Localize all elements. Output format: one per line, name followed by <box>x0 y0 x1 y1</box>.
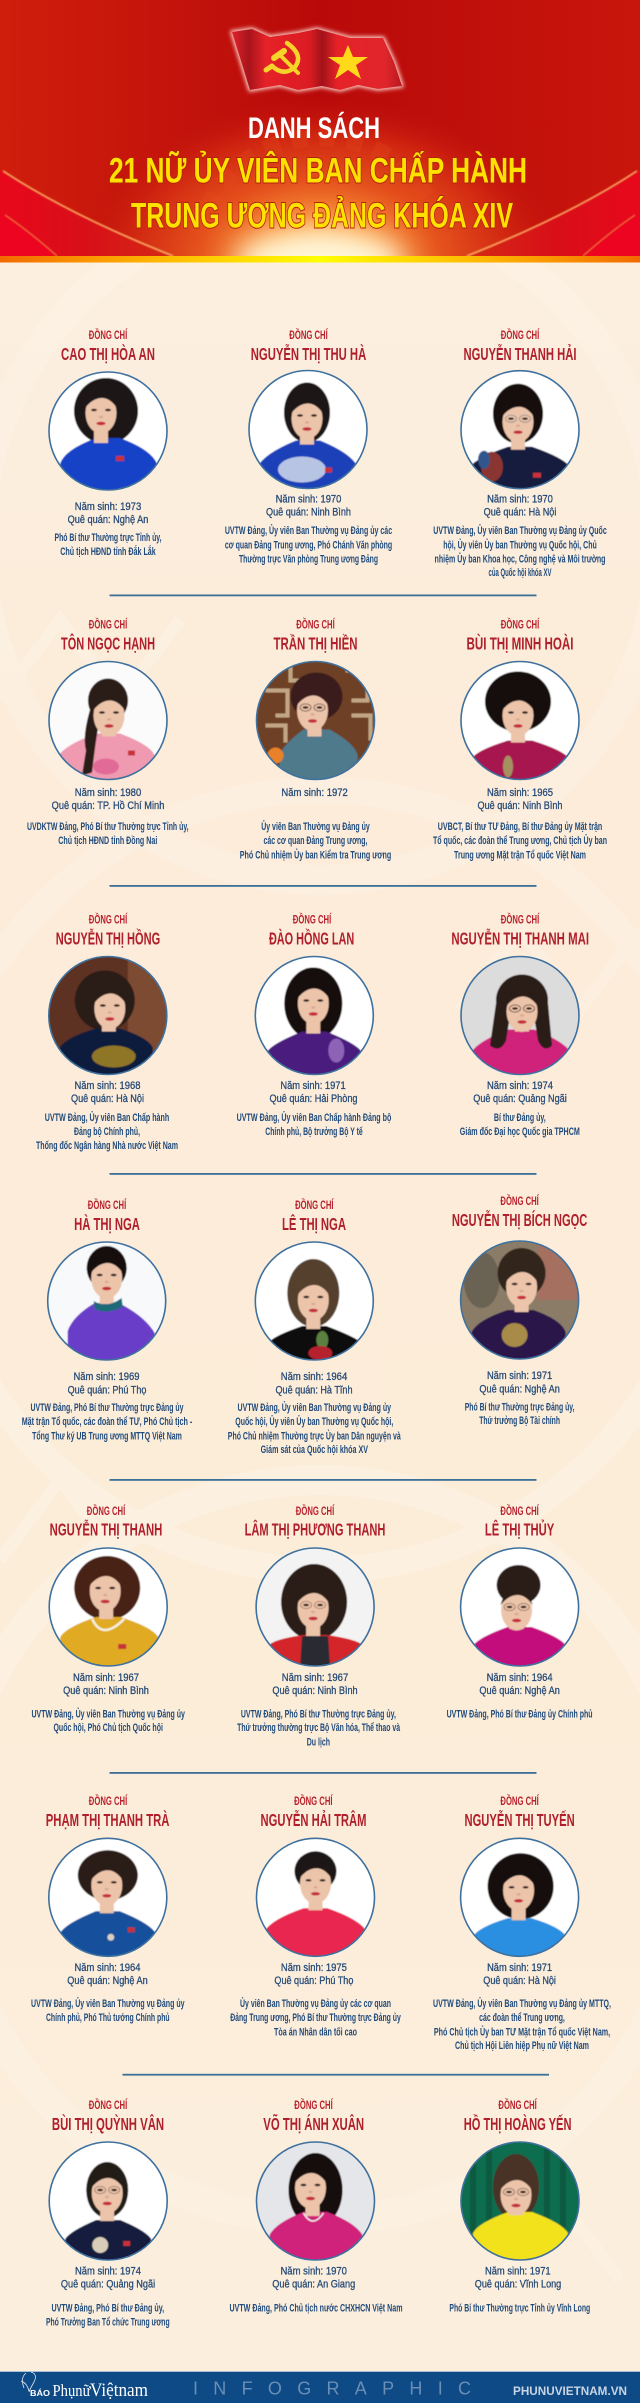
card: Tôn Ngọc Hạnh: Chủ tịch HĐND tỉnh Đồng Nai <box>58 835 157 847</box>
portrait <box>256 2141 376 2261</box>
bio: Năm sinh: 1964 <box>74 1962 140 1974</box>
portrait <box>255 1547 375 1667</box>
card: Nguyễn Thị Thanh: Quê quán: Ninh Bình <box>63 1685 149 1697</box>
bio: Năm sinh: 1969 <box>74 1371 140 1383</box>
card: Trần Thị Hiền: Phó Chủ nhiệm Ủy ban Kiểm tra Trung ương <box>240 848 391 862</box>
role: Phó Bí thư Thường trực Đảng ủy, <box>465 1402 574 1414</box>
card: Phạm Thị Thanh Trà <box>31 1795 185 2024</box>
card: Nguyễn Thị Thu Hà: ĐỒNG CHÍ <box>289 329 328 342</box>
portrait <box>460 660 580 780</box>
card: Tôn Ngọc Hạnh: ĐỒNG CHÍ <box>89 618 128 632</box>
card: Nguyễn Thị Thu Hà <box>225 329 392 566</box>
card: Nguyễn Thị Thu Hà: Thường trực Văn phòng Trung ương Đảng <box>239 554 378 566</box>
card: Bùi Thị Minh Hoài: Quê quán: Ninh Bình <box>478 800 562 812</box>
card: Lê Thị Nga: Phó Chủ nhiệm Thường trực Ủy ban Dân nguyện và <box>228 1430 401 1442</box>
card: Bùi Thị Quỳnh Vân: ĐỒNG CHÍ <box>89 2099 128 2112</box>
bio: Năm sinh: 1980 <box>75 787 141 799</box>
portrait <box>254 1241 374 1361</box>
card: Cao Thị Hòa An: ĐỒNG CHÍ <box>89 329 128 342</box>
card: Hồ Thị Hoàng Yến: Quê quán: Vĩnh Long <box>475 2278 561 2290</box>
role: Phó Bí thư Thường trực Tỉnh ủy, <box>54 532 162 544</box>
card: Nguyễn Hải Trâm: Đảng Trung ương, Phó Bí thư Thường trực Đảng ủy <box>230 2012 401 2024</box>
card: Nguyễn Hải Trâm: ĐỒNG CHÍ <box>294 1795 333 1808</box>
bio: Năm sinh: 1972 <box>281 787 348 799</box>
card: Võ Thị Ánh Xuân <box>230 2099 403 2314</box>
card: Phạm Thị Thanh Trà: ĐỒNG CHÍ <box>89 1795 128 1808</box>
card: Đào Hồng Lan <box>237 914 392 1138</box>
card: Lê Thị Nga: Giám sát của Quốc hội khóa XV <box>261 1444 368 1456</box>
header gold band <box>0 256 640 262</box>
portrait <box>48 660 168 780</box>
bio: Năm sinh: 1971 <box>487 1962 552 1974</box>
card: Nguyễn Thị Thu Hà: cơ quan Đảng Trung ương, Phó Chánh Văn phòng <box>225 540 392 552</box>
card: Bùi Thị Minh Hoài <box>433 618 607 862</box>
card: Nguyễn Thị Tuyến <box>433 1795 611 2052</box>
name: CAO THỊ HÒA AN <box>61 343 155 364</box>
card: Nguyễn Thanh Hải <box>433 329 607 579</box>
portrait <box>48 956 168 1076</box>
bio: Năm sinh: 1974 <box>75 2266 141 2278</box>
role: UVTW Đảng, Phó Bí thư Thường trực Đảng ủy, <box>241 1708 396 1720</box>
card: Nguyễn Thị Bích Ngọc <box>452 1195 588 1427</box>
name: BÙI THỊ QUỲNH VÂN <box>52 2113 164 2134</box>
portrait <box>48 371 168 491</box>
card: Nguyễn Thị Thanh Mai: Giám đốc Đại học Quốc gia TPHCM <box>460 1126 580 1138</box>
name: PHẠM THỊ THANH TRÀ <box>46 1809 170 1830</box>
card: Hồ Thị Hoàng Yến: ĐỒNG CHÍ <box>498 2099 537 2112</box>
card: Hà Thị Nga: Tổng Thư ký UB Trung ương MTTQ Việt Nam <box>32 1430 182 1442</box>
bio: Năm sinh: 1970 <box>276 494 341 506</box>
footer <box>0 2371 640 2403</box>
footer logo: Phụnữ <box>52 2381 91 2400</box>
card: Nguyễn Thị Tuyến: các đoàn thể Trung ương, <box>479 2012 565 2024</box>
card: Nguyễn Thị Thanh Mai <box>451 914 589 1138</box>
name: NGUYỄN THỊ HỒNG <box>56 927 160 948</box>
card: Nguyễn Thị Tuyến: Quê quán: Hà Nội <box>483 1975 556 1987</box>
name: NGUYỄN THỊ THU HÀ <box>251 343 366 364</box>
card: Hà Thị Nga <box>22 1199 193 1442</box>
card: Nguyễn Thị Hồng <box>36 914 178 1152</box>
footer logo: Việtnam <box>90 2380 148 2401</box>
name: NGUYỄN THANH HẢI <box>464 343 576 364</box>
footer logo: BÁO <box>30 2389 50 2398</box>
name: LÂM THỊ PHƯƠNG THANH <box>245 1519 385 1540</box>
footer logo <box>21 2372 148 2401</box>
card: Phạm Thị Thanh Trà: Quê quán: Nghệ An <box>67 1975 148 1987</box>
name: LÊ THỊ THỦY <box>485 1519 555 1540</box>
card: Đào Hồng Lan: Quê quán: Hải Phòng <box>270 1093 358 1105</box>
card: Cao Thị Hòa An: Chủ tịch HĐND tỉnh Đắk Lắk <box>60 545 156 558</box>
card: Nguyễn Thị Bích Ngọc: Quê quán: Nghệ An <box>479 1384 560 1396</box>
card: Hà Thị Nga: Quê quán: Phú Thọ <box>68 1384 146 1396</box>
name: NGUYỄN THỊ THANH <box>50 1519 162 1540</box>
name: TRẦN THỊ HIỀN <box>274 632 358 653</box>
card: Nguyễn Thị Thanh: Quốc hội, Phó Chủ tịch Quốc hội <box>54 1722 163 1734</box>
portrait <box>47 1241 167 1361</box>
card: Nguyễn Thị Hồng: Đảng bộ Chính phủ, <box>74 1126 140 1138</box>
name: NGUYỄN HẢI TRÂM <box>260 1809 366 1830</box>
role: UVTW Đảng, Phó Bí thư Đảng ủy, <box>51 2302 164 2314</box>
bio: Năm sinh: 1968 <box>74 1080 140 1092</box>
card: Lâm Thị Phương Thanh: Thứ trưởng thường trực Bộ Văn hóa, Thể thao và <box>237 1722 401 1734</box>
portrait <box>254 956 374 1076</box>
portrait <box>248 370 368 490</box>
bio: Năm sinh: 1975 <box>281 1962 347 1974</box>
portrait <box>256 1837 376 1957</box>
name: TÔN NGỌC HẠNH <box>61 632 155 653</box>
name: HÀ THỊ NGA <box>74 1213 140 1234</box>
card: Nguyễn Thị Hồng: Quê quán: Hà Nội <box>71 1093 144 1105</box>
card: Nguyễn Hải Trâm <box>230 1795 401 2038</box>
portrait <box>48 1547 168 1667</box>
card: Lê Thị Nga <box>228 1199 401 1456</box>
bio: Năm sinh: 1967 <box>73 1672 139 1684</box>
card: Nguyễn Thị Hồng: Thống đốc Ngân hàng Nhà nước Việt Nam <box>36 1140 178 1152</box>
portrait <box>460 1547 580 1667</box>
role: UVTW Đảng, Ủy viên Ban Chấp hành Đảng bộ <box>237 1111 392 1124</box>
role: UVTW Đảng, Ủy viên Ban Thường vụ Đảng ủy <box>31 1997 185 2010</box>
card: Võ Thị Ánh Xuân: ĐỒNG CHÍ <box>294 2099 333 2112</box>
card: Tôn Ngọc Hạnh <box>27 618 189 847</box>
card: Bùi Thị Minh Hoài: ĐỒNG CHÍ <box>501 618 540 632</box>
card: Lê Thị Nga: Quốc hội, Ủy viên Ủy ban Thường vụ Quốc hội, <box>235 1415 393 1428</box>
header banner <box>0 0 640 256</box>
name: LÊ THỊ NGA <box>282 1213 346 1234</box>
role: Ủy viên Ban Thường vụ Đảng ủy các cơ quan <box>240 1997 391 2010</box>
portrait <box>48 2141 168 2261</box>
card: Nguyễn Thanh Hải: của Quốc hội khóa XV <box>488 567 552 579</box>
name: NGUYỄN THỊ TUYẾN <box>464 1809 575 1830</box>
bio: Năm sinh: 1971 <box>487 1370 552 1382</box>
card: Lâm Thị Phương Thanh: Du lịch <box>307 1736 330 1748</box>
role: UVTW Đảng, Phó Chủ tịch nước CHXHCN Việt Nam <box>230 2302 403 2314</box>
card: Cao Thị Hòa An <box>48 329 168 558</box>
card: Lâm Thị Phương Thanh <box>237 1505 401 1748</box>
card: Nguyễn Thị Bích Ngọc: Thứ trưởng Bộ Tài chính <box>479 1415 560 1427</box>
card: Nguyễn Thị Thu Hà: Quê quán: Ninh Bình <box>266 506 351 518</box>
bio: Năm sinh: 1964 <box>487 1672 553 1684</box>
bio: Năm sinh: 1973 <box>75 501 141 513</box>
portrait <box>48 1837 168 1957</box>
portrait <box>460 1240 580 1360</box>
footer label: INFOGRAPHIC <box>193 2378 471 2398</box>
portrait <box>460 370 580 490</box>
card: Đào Hồng Lan: Chính phủ, Bộ trưởng Bộ Y tế <box>265 1126 363 1138</box>
card: Lê Thị Thủy: Quê quán: Nghệ An <box>479 1685 560 1697</box>
name: ĐÀO HỒNG LAN <box>269 927 354 948</box>
card: Nguyễn Thanh Hải: ĐỒNG CHÍ <box>501 329 540 342</box>
card: Hà Thị Nga: Mặt trận Tổ quốc, các đoàn thể TƯ, Phó Chủ tịch - <box>22 1416 193 1428</box>
role: UVTW Đảng, Ủy viên Ban Thường vụ Đảng ủy <box>31 1708 186 1720</box>
role: UVTW Đảng, Ủy viên Ban Chấp hành <box>45 1111 169 1124</box>
bio: Năm sinh: 1970 <box>280 2266 347 2278</box>
role: UVTW Đảng, Phó Bí thư Thường trực Đảng ủy <box>30 1402 184 1414</box>
bio: Năm sinh: 1967 <box>282 1672 348 1684</box>
card: Nguyễn Hải Trâm: Quê quán: Phú Thọ <box>274 1975 353 1987</box>
card: Hà Thị Nga: ĐỒNG CHÍ <box>88 1199 127 1212</box>
card: Lê Thị Nga: Quê quán: Hà Tĩnh <box>276 1384 352 1396</box>
card: Lâm Thị Phương Thanh: ĐỒNG CHÍ <box>296 1505 335 1518</box>
role: Ủy viên Ban Thường vụ Đảng ủy <box>261 820 370 833</box>
card: Tôn Ngọc Hạnh: Quê quán: TP. Hồ Chí Minh <box>52 800 164 812</box>
card: Nguyễn Thị Tuyến: ĐỒNG CHÍ <box>500 1795 539 1808</box>
title: DANH SÁCH <box>248 111 380 145</box>
bio: Năm sinh: 1964 <box>281 1371 347 1383</box>
card: Đào Hồng Lan: ĐỒNG CHÍ <box>293 914 332 926</box>
card: Nguyễn Thị Thanh: ĐỒNG CHÍ <box>87 1505 126 1518</box>
card: Võ Thị Ánh Xuân: Quê quán: An Giang <box>272 2278 355 2290</box>
icon: party and national flags <box>232 29 402 90</box>
bio: Năm sinh: 1971 <box>485 2266 551 2278</box>
card: Bùi Thị Quỳnh Vân: Phó Trưởng Ban Tổ chức Trung ương <box>46 2316 170 2328</box>
card: Nguyễn Thị Thanh Mai: Quê quán: Quảng Ngãi <box>473 1093 567 1105</box>
card: Hồ Thị Hoàng Yến <box>449 2099 590 2314</box>
name: VÕ THỊ ÁNH XUÂN <box>263 2113 364 2134</box>
card: Nguyễn Thị Thanh <box>31 1505 186 1734</box>
role: UVTW Đảng, Ủy viên Ban Thường vụ Đảng ủy <box>238 1401 392 1414</box>
bio: Năm sinh: 1971 <box>280 1080 346 1092</box>
name: BÙI THỊ MINH HOÀI <box>466 632 574 653</box>
card: Lâm Thị Phương Thanh: Quê quán: Ninh Bình <box>272 1685 358 1697</box>
card: Lê Thị Nga: ĐỒNG CHÍ <box>295 1199 334 1212</box>
name: HỒ THỊ HOÀNG YẾN <box>464 2113 571 2134</box>
card: Lê Thị Thủy <box>447 1505 593 1720</box>
portrait <box>460 956 580 1076</box>
card: Bùi Thị Quỳnh Vân: Quê quán: Quảng Ngãi <box>61 2278 155 2290</box>
card: Nguyễn Thị Bích Ngọc: ĐỒNG CHÍ <box>500 1195 539 1208</box>
card: Nguyễn Thanh Hải: Quê quán: Hà Nội <box>484 506 556 518</box>
portrait <box>256 660 376 780</box>
card: Cao Thị Hòa An: Quê quán: Nghệ An <box>68 514 148 526</box>
role: Bí thư Đảng ủy, <box>494 1112 546 1124</box>
card: Nguyễn Hải Trâm: Tòa án Nhân dân tối cao <box>274 2026 357 2038</box>
card: Trần Thị Hiền <box>240 618 391 862</box>
bio: Năm sinh: 1974 <box>487 1080 553 1092</box>
portrait <box>460 2141 580 2261</box>
bio: Năm sinh: 1970 <box>487 494 553 506</box>
card: Trần Thị Hiền: ĐỒNG CHÍ <box>296 618 335 632</box>
footer website: PHUNUVIETNAM.VN <box>513 2386 627 2398</box>
title <box>109 111 527 236</box>
role: UVTW Đảng, Ủy viên Ban Thường vụ Đảng ủy các <box>225 524 392 537</box>
role: UVDKTW Đảng, Phó Bí thư Thường trực Tỉnh ủy, <box>27 821 189 833</box>
card: Phạm Thị Thanh Trà: Chính phủ, Phó Thủ tướng Chính phủ <box>46 2012 170 2024</box>
card: Bùi Thị Quỳnh Vân <box>46 2099 170 2328</box>
portrait <box>460 1837 580 1957</box>
card: Trần Thị Hiền: các cơ quan Đảng Trung ương, <box>264 835 368 847</box>
bio: Năm sinh: 1965 <box>487 787 553 799</box>
card: Lê Thị Thủy: ĐỒNG CHÍ <box>500 1505 539 1518</box>
card: Nguyễn Thị Thanh Mai: ĐỒNG CHÍ <box>501 914 540 926</box>
card: Nguyễn Thị Hồng: ĐỒNG CHÍ <box>89 914 128 926</box>
